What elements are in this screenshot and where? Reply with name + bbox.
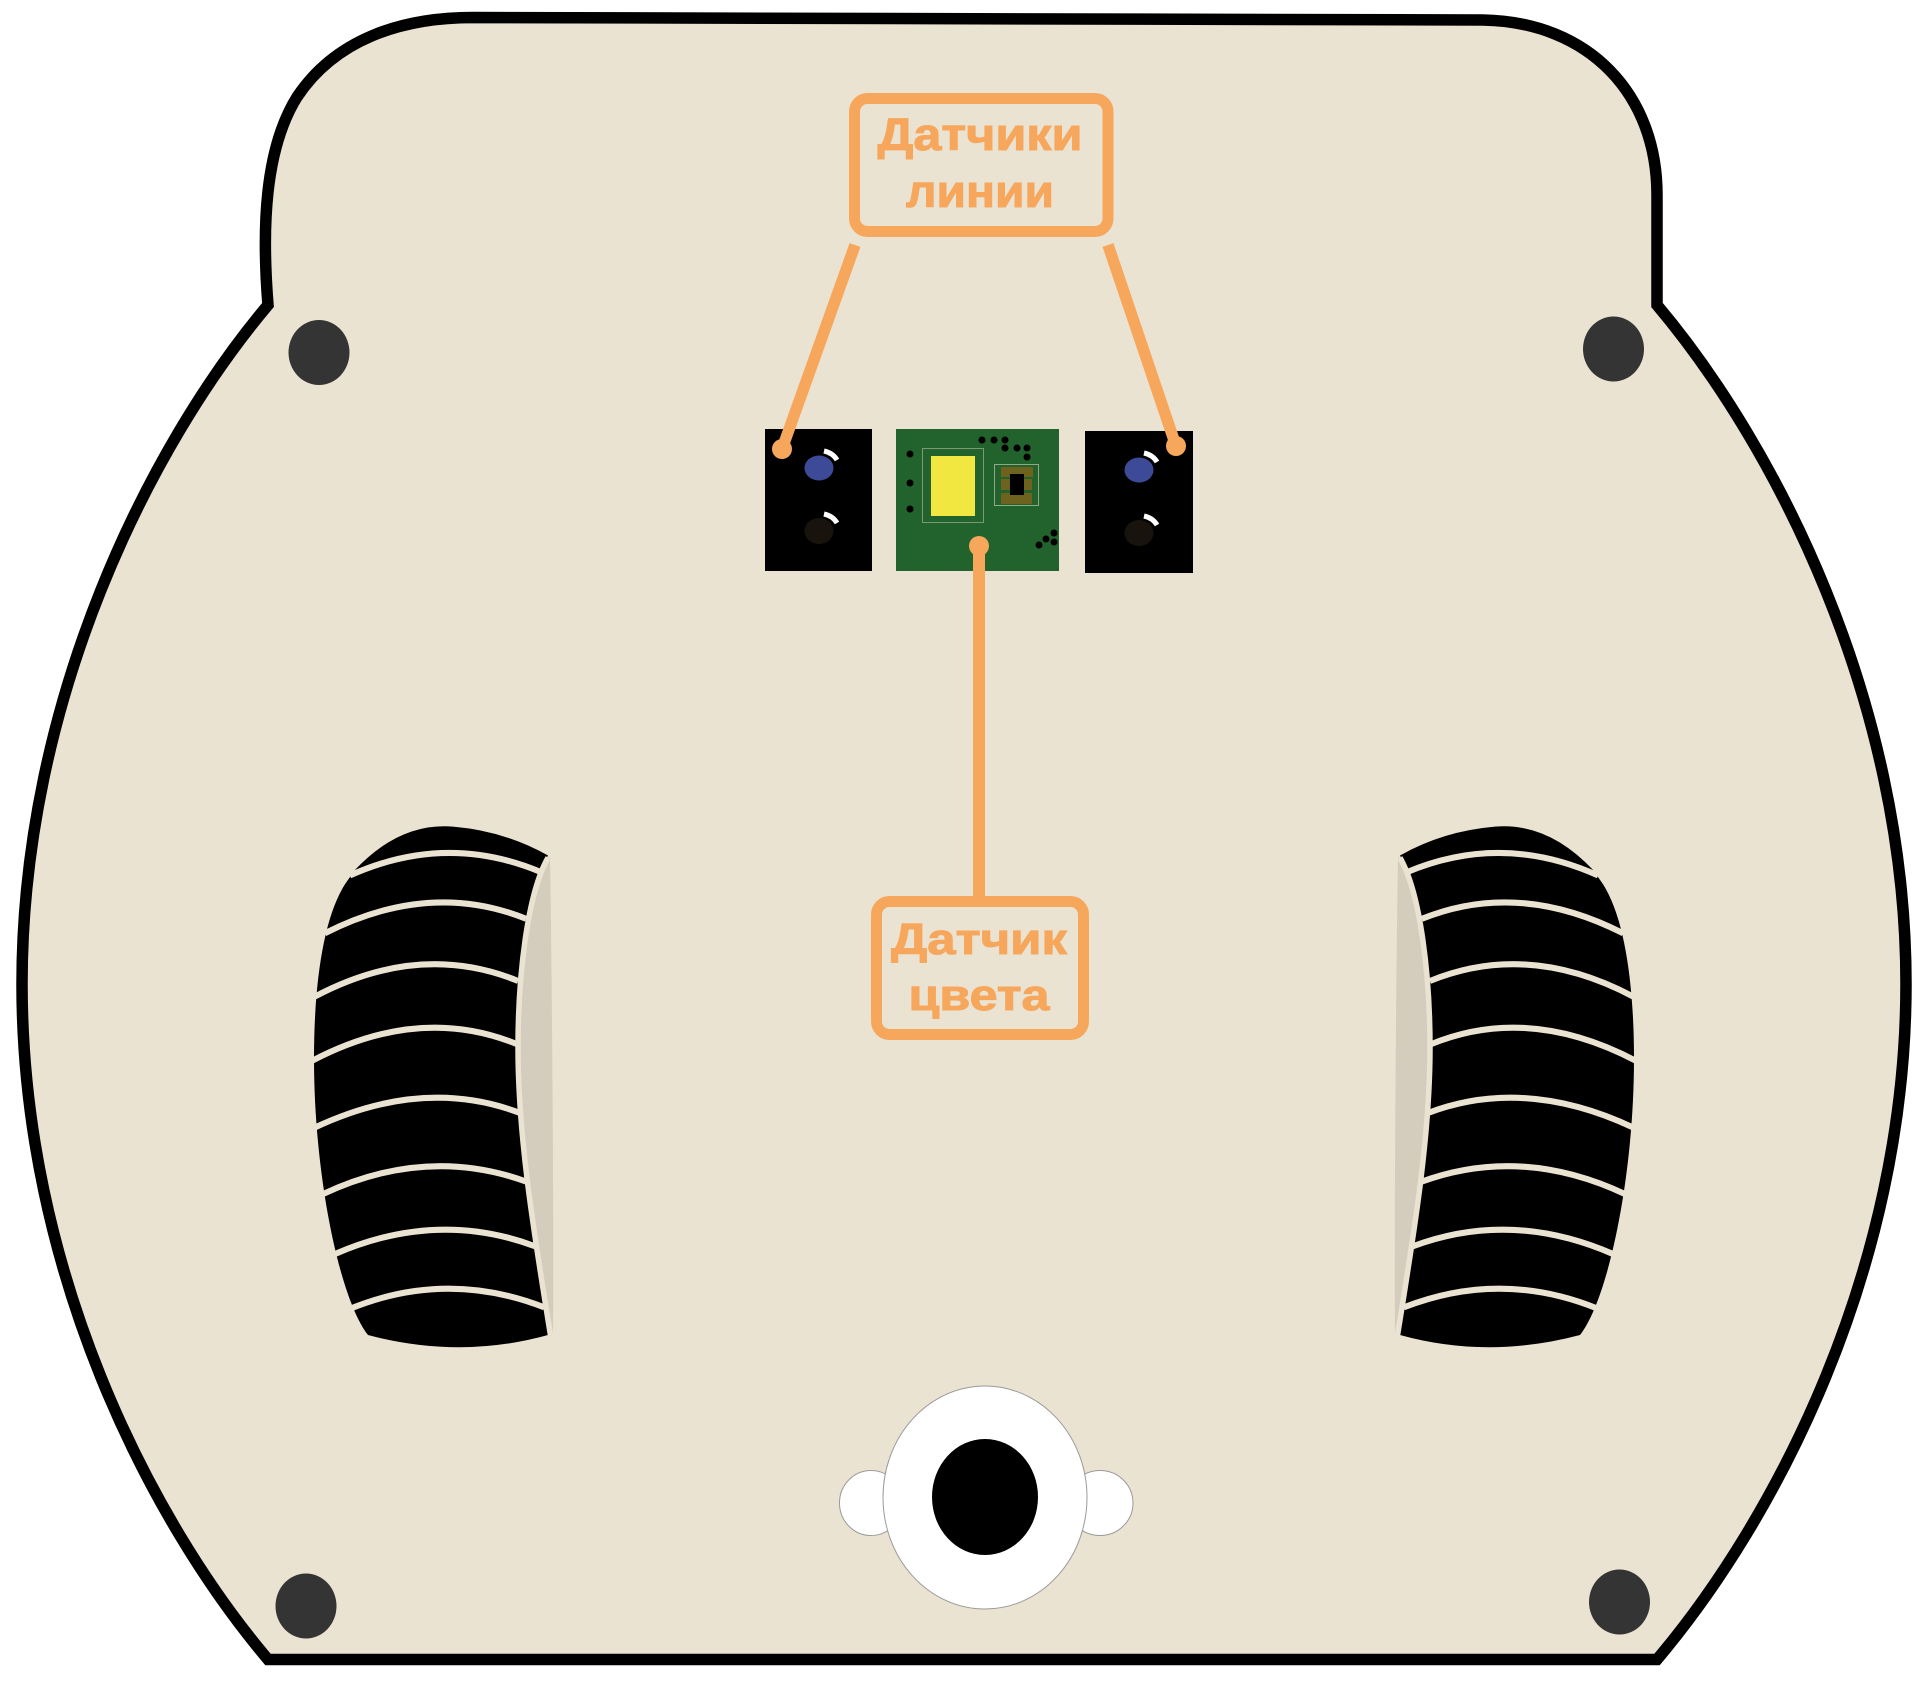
arrow: to color sensor bbox=[969, 536, 989, 902]
callout: color sensor: Датчик bbox=[891, 915, 1068, 964]
arrow: to right line sensor bbox=[1108, 245, 1186, 456]
callout: line sensors: линии bbox=[906, 166, 1054, 217]
left line sensor bbox=[765, 429, 872, 571]
callout: line sensors: Датчики bbox=[878, 109, 1082, 160]
callout: color sensor: цвета bbox=[908, 971, 1050, 1020]
right line sensor bbox=[1085, 431, 1193, 573]
left wheel bbox=[312, 826, 553, 1347]
caster wheel bbox=[840, 1386, 1133, 1609]
callout: line sensors bbox=[854, 98, 1108, 232]
callout: color sensor bbox=[876, 902, 1084, 1034]
mounting holes bbox=[276, 316, 1650, 1638]
color sensor board bbox=[896, 429, 1059, 571]
arrow: to left line sensor bbox=[772, 245, 855, 459]
right wheel bbox=[1395, 826, 1636, 1347]
